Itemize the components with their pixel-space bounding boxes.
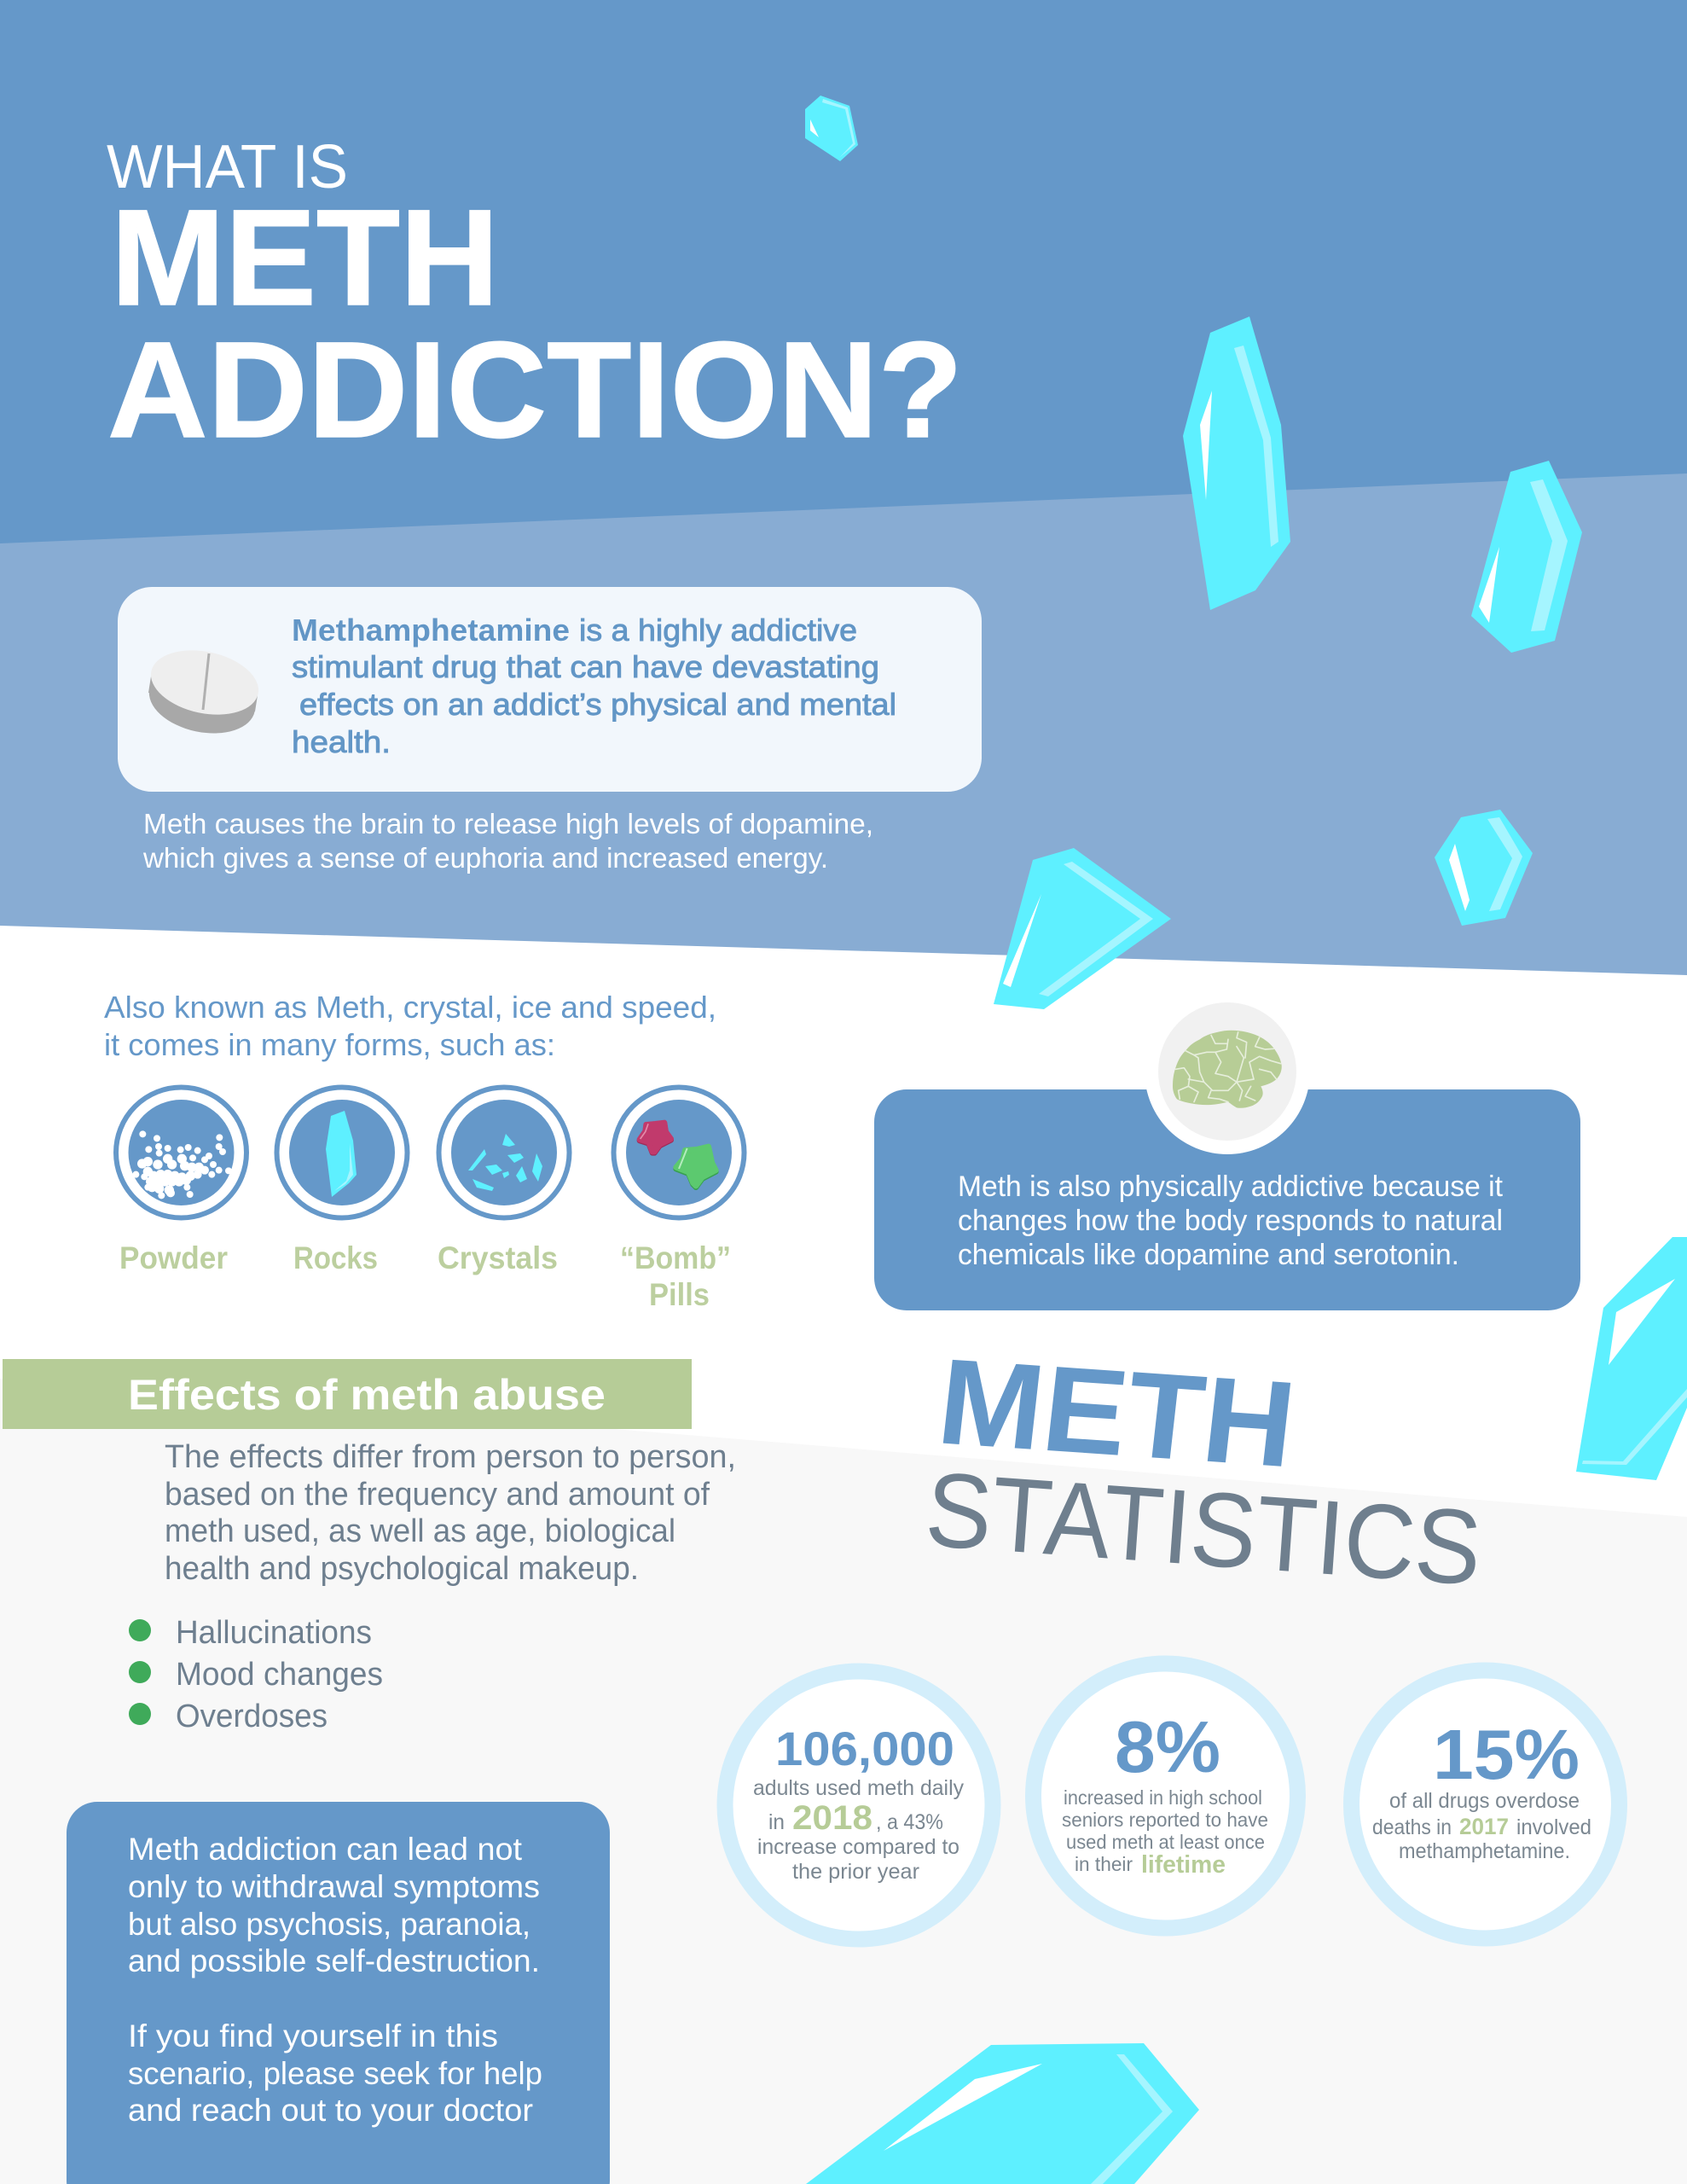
text: also known as: Also known as Meth, crystal, ice and speed, [104,990,716,1025]
stat: 15%: 15% [1433,1715,1580,1794]
text: physically addictive [958,1170,1504,1271]
definition text: stimulant drug that can have devastating [292,649,879,684]
crystal: bottom [806,2043,1199,2184]
label: powder: Powder [119,1240,228,1275]
stat: 15% [1351,1670,1619,1938]
stat: 8%: increased in high school [1064,1786,1262,1809]
label: crystals: Crystals [438,1240,558,1275]
panel: seek help: If you find yourself in this [128,2018,498,2053]
text: physically addictive: Meth is also physically addictive because it [958,1170,1504,1203]
icon: brain [1173,1031,1282,1108]
stat: 8% [1034,1664,1298,1928]
icon: pill [143,641,264,742]
text: effects paragraph: based on the frequency and amount of [165,1477,710,1513]
list: effects bullets: Mood changes [176,1657,383,1693]
stat: 106,000: increase compared to [757,1835,959,1859]
crystal: right middle [1435,810,1533,926]
text: dopamine explanation: which gives a sense of euphoria and increased energy. [142,842,828,874]
heading: effects of meth abuse: Effects of meth abuse [128,1371,606,1419]
crystal: triangular [994,848,1171,1009]
label: bomb pills: Pills [649,1277,710,1312]
stat: 8%: 8% [1115,1707,1220,1788]
panel: seek help: only to withdrawal symptoms [128,1869,540,1904]
stat: 8%: used meth at least once [1066,1831,1265,1853]
text: effects paragraph: health and psychological makeup. [165,1551,639,1587]
stat: 106,000: 2018 [792,1799,872,1837]
stat: 15%: deaths in [1372,1815,1452,1839]
panel: seek help: scenario, please seek for help [128,2056,542,2091]
crystal: right [1471,461,1582,653]
title: METH [111,181,499,334]
stat: 15%: involved [1516,1815,1591,1839]
definition text: is a highly addictive [579,613,857,648]
panel: physically addictive [874,989,1580,1310]
title: ADDICTION? [107,313,963,466]
text: dopamine explanation: Meth causes the brain to release high levels of dopamine, [143,808,873,839]
text: effects paragraph: The effects differ from person to person, [165,1439,736,1475]
icon: crystals [438,1087,570,1218]
heading: effects of meth abuse [3,1359,692,1429]
stat: 15%: of all drugs overdose [1389,1789,1580,1813]
text: physically addictive: chemicals like dopamine and serotonin. [958,1239,1459,1271]
list: effects bullets: Overdoses [176,1699,328,1734]
icon: rocks [276,1087,408,1218]
stat: 106,000: the prior year [792,1860,919,1884]
panel: seek help [67,1802,610,2184]
stat: 15%: methamphetamine. [1399,1839,1570,1863]
stat: 106,000: in [768,1810,785,1834]
crystal: large [1183,317,1290,610]
heading: meth statistics: METH [932,1333,1301,1493]
title: WHAT IS [107,133,348,201]
title [107,133,963,466]
panel: seek help: and possible self-destruction. [128,1943,540,1978]
list: effects bullets: Hallucinations [176,1615,372,1651]
stat: 106,000 [725,1671,993,1939]
definition text: Methamphetamine [292,613,570,648]
panel: seek help: and reach out to your doctor [128,2093,533,2128]
stat: 8%: lifetime [1141,1851,1226,1879]
heading: meth statistics [922,1333,1485,1608]
list: effects bullets [129,1615,383,1734]
label: bomb pills: “Bomb” [620,1240,731,1275]
stat: 15%: 2017 [1459,1814,1509,1839]
text: also known as [104,990,716,1062]
stat: 106,000: adults used meth daily [753,1776,964,1800]
text: effects paragraph [165,1439,736,1587]
icon: powder [116,1087,246,1218]
text: also known as: it comes in many forms, such as: [104,1027,555,1062]
stat: 106,000: 106,000 [775,1722,954,1775]
stat: 106,000: , a 43% [876,1810,943,1834]
panel: seek help: Meth addiction can lead not [128,1832,523,1867]
stat: 8%: in their [1075,1853,1133,1875]
text: dopamine explanation [142,808,873,874]
text: physically addictive: changes how the body responds to natural [958,1205,1503,1237]
definition text: health. [292,724,391,759]
icon: bomb pills [614,1087,744,1218]
panel: methamphetamine definition [118,587,982,792]
heading: meth statistics: STATISTICS [922,1450,1485,1608]
stat: 8%: seniors reported to have [1062,1809,1268,1831]
definition text: effects on an addict’s physical and mental [299,687,896,722]
crystal: right edge [1576,1237,1687,1480]
text: effects paragraph: meth used, as well as age, biological [165,1513,675,1549]
crystal: small top [805,96,858,161]
definition text [292,613,896,759]
panel: seek help: but also psychosis, paranoia, [128,1907,530,1942]
label: rocks: Rocks [293,1240,378,1275]
label: bomb pills [620,1240,731,1312]
